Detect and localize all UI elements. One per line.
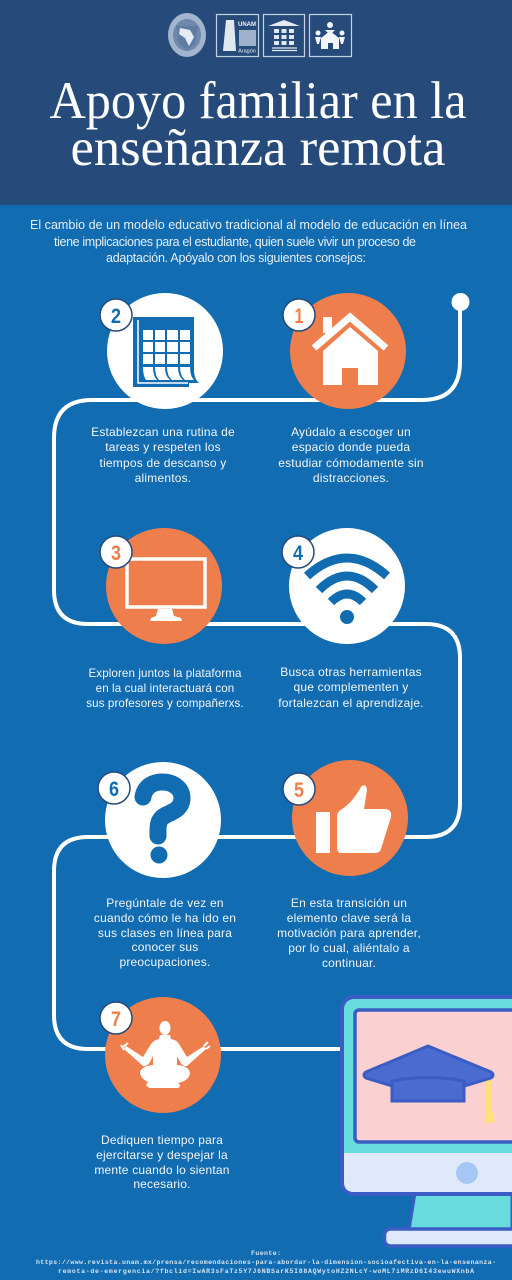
text: step 4 <box>278 665 424 710</box>
text: step 3: sus profesores y compañerxs. <box>86 697 244 710</box>
title <box>50 72 466 177</box>
text: step 3: en la cual interactuará con <box>96 682 234 695</box>
text: step 6: cuando cómo le ha ido en <box>94 911 236 925</box>
icon: house <box>314 317 386 385</box>
text: step 4: Busca otras herramientas <box>280 665 422 679</box>
circle: step 1 <box>290 293 406 409</box>
icon: calendar <box>133 317 199 387</box>
step 3 <box>86 528 244 710</box>
intro text: El cambio de un modelo educativo tradicional al modelo de educación en línea <box>30 218 467 232</box>
logo: FES Aragón <box>216 14 258 56</box>
intro text <box>30 218 467 265</box>
text: step 7: Dediquen tiempo para <box>101 1133 223 1147</box>
icon: question mark <box>143 782 182 864</box>
icon: graduation cap <box>364 1046 495 1123</box>
text: step 2: tareas y respeten los <box>105 440 221 454</box>
badge: number 5: 5 <box>294 779 304 802</box>
text: step 6: conocer sus <box>132 940 198 954</box>
badge: number 6 <box>98 772 130 804</box>
icon: meditating person <box>121 1021 210 1088</box>
intro text: adaptación. Apóyalo con los siguientes consejos: <box>106 251 366 265</box>
badge: number 4: 4 <box>293 542 303 565</box>
text: step 1: estudiar cómodamente sin <box>278 456 424 470</box>
text: step 4: que complementen y <box>294 680 408 694</box>
badge: number 7 <box>100 1002 132 1034</box>
text: step 6: sus clases en línea para <box>98 926 232 940</box>
text: step 2: tiempos de descanso y <box>100 456 226 470</box>
intro text: tiene implicaciones para el estudiante, quien suele vivir un proceso de <box>54 235 416 249</box>
text: step 3 <box>86 667 244 710</box>
text: step 5: elemento clave será la <box>287 911 411 925</box>
text: step 6 <box>94 896 236 969</box>
step 2 <box>91 293 235 485</box>
badge: number 1: 1 <box>294 305 304 328</box>
badge: number 4 <box>282 536 314 568</box>
text: step 5: motivación para aprender, <box>277 926 421 940</box>
logo: FES Aragón: Aragón <box>238 48 256 54</box>
icon: wifi <box>307 558 387 624</box>
circle: step 3 <box>106 528 222 644</box>
icon: monitor <box>127 559 205 621</box>
text: step 2 <box>91 425 235 485</box>
source footer: Fuente: <box>251 1250 281 1257</box>
text: step 5: por lo cual, aliéntalo a <box>288 941 410 955</box>
step 4 <box>278 528 424 710</box>
text: step 7: mente cuando lo sientan <box>94 1163 230 1177</box>
circle: step 5 <box>292 760 408 876</box>
text: step 2: alimentos. <box>135 471 191 485</box>
badge: number 3: 3 <box>111 542 121 565</box>
source footer: remota-de-emergencia/?fbclid=IwAR3sFaTz5Y7J6NBSarK5I88AQWytoHZ2NLcY-woML7iMRzD6I43ewuWXnbA <box>58 1268 474 1275</box>
title: Apoyo familiar en la <box>50 72 466 130</box>
circle: step 4 <box>289 528 405 644</box>
badge: number 1 <box>283 299 315 331</box>
text: step 2: Establezcan una rutina de <box>91 425 235 439</box>
step 6 <box>94 762 236 969</box>
winding path line <box>54 302 460 1049</box>
badge: number 2: 2 <box>111 305 121 328</box>
source footer: https://www.revista.unam.mx/prensa/recomendaciones-para-abordar-la-dimension-socioafectiva-en-la-ensenanza- <box>36 1259 496 1266</box>
text: step 1 <box>278 425 424 485</box>
text: step 4: fortalezcan el aprendizaje. <box>278 696 424 710</box>
text: step 7: necesario. <box>133 1177 191 1191</box>
text: step 3: Exploren juntos la plataforma <box>88 667 242 680</box>
path start dot <box>452 293 470 311</box>
icon: thumbs up <box>316 785 391 853</box>
text: step 6: Pregúntale de vez en <box>106 896 224 910</box>
logo: building <box>264 14 304 56</box>
badge: number 5 <box>283 773 315 805</box>
text: step 5: continuar. <box>322 956 376 970</box>
text: step 1: distracciones. <box>313 471 389 485</box>
step 5 <box>277 760 421 970</box>
title: enseñanza remota <box>70 119 446 177</box>
illustration: computer with graduation cap <box>342 997 512 1246</box>
badge: number 7: 7 <box>111 1008 121 1031</box>
text: step 6: preocupaciones. <box>119 955 211 969</box>
header band <box>0 0 512 205</box>
step 1 <box>278 293 424 485</box>
source footer <box>36 1250 496 1275</box>
logo: UNAM crest <box>168 13 206 57</box>
circle: step 7 <box>105 997 221 1113</box>
text: step 5: En esta transición un <box>291 896 407 910</box>
step 7 <box>94 997 230 1191</box>
circle: step 2 <box>107 293 223 409</box>
text: step 7: ejercitarse y despejar la <box>96 1148 228 1162</box>
text: step 1: espacio donde pueda <box>292 440 410 454</box>
circle: step 6 <box>105 762 221 878</box>
text: step 1: Ayúdalo a escoger un <box>291 425 411 439</box>
logo: FES Aragón: UNAM <box>238 22 256 28</box>
text: step 7 <box>94 1133 230 1191</box>
badge: number 2 <box>100 299 132 331</box>
badge: number 3 <box>100 536 132 568</box>
badge: number 6: 6 <box>109 778 119 801</box>
logo: family house <box>310 14 352 56</box>
text: step 5 <box>277 896 421 970</box>
